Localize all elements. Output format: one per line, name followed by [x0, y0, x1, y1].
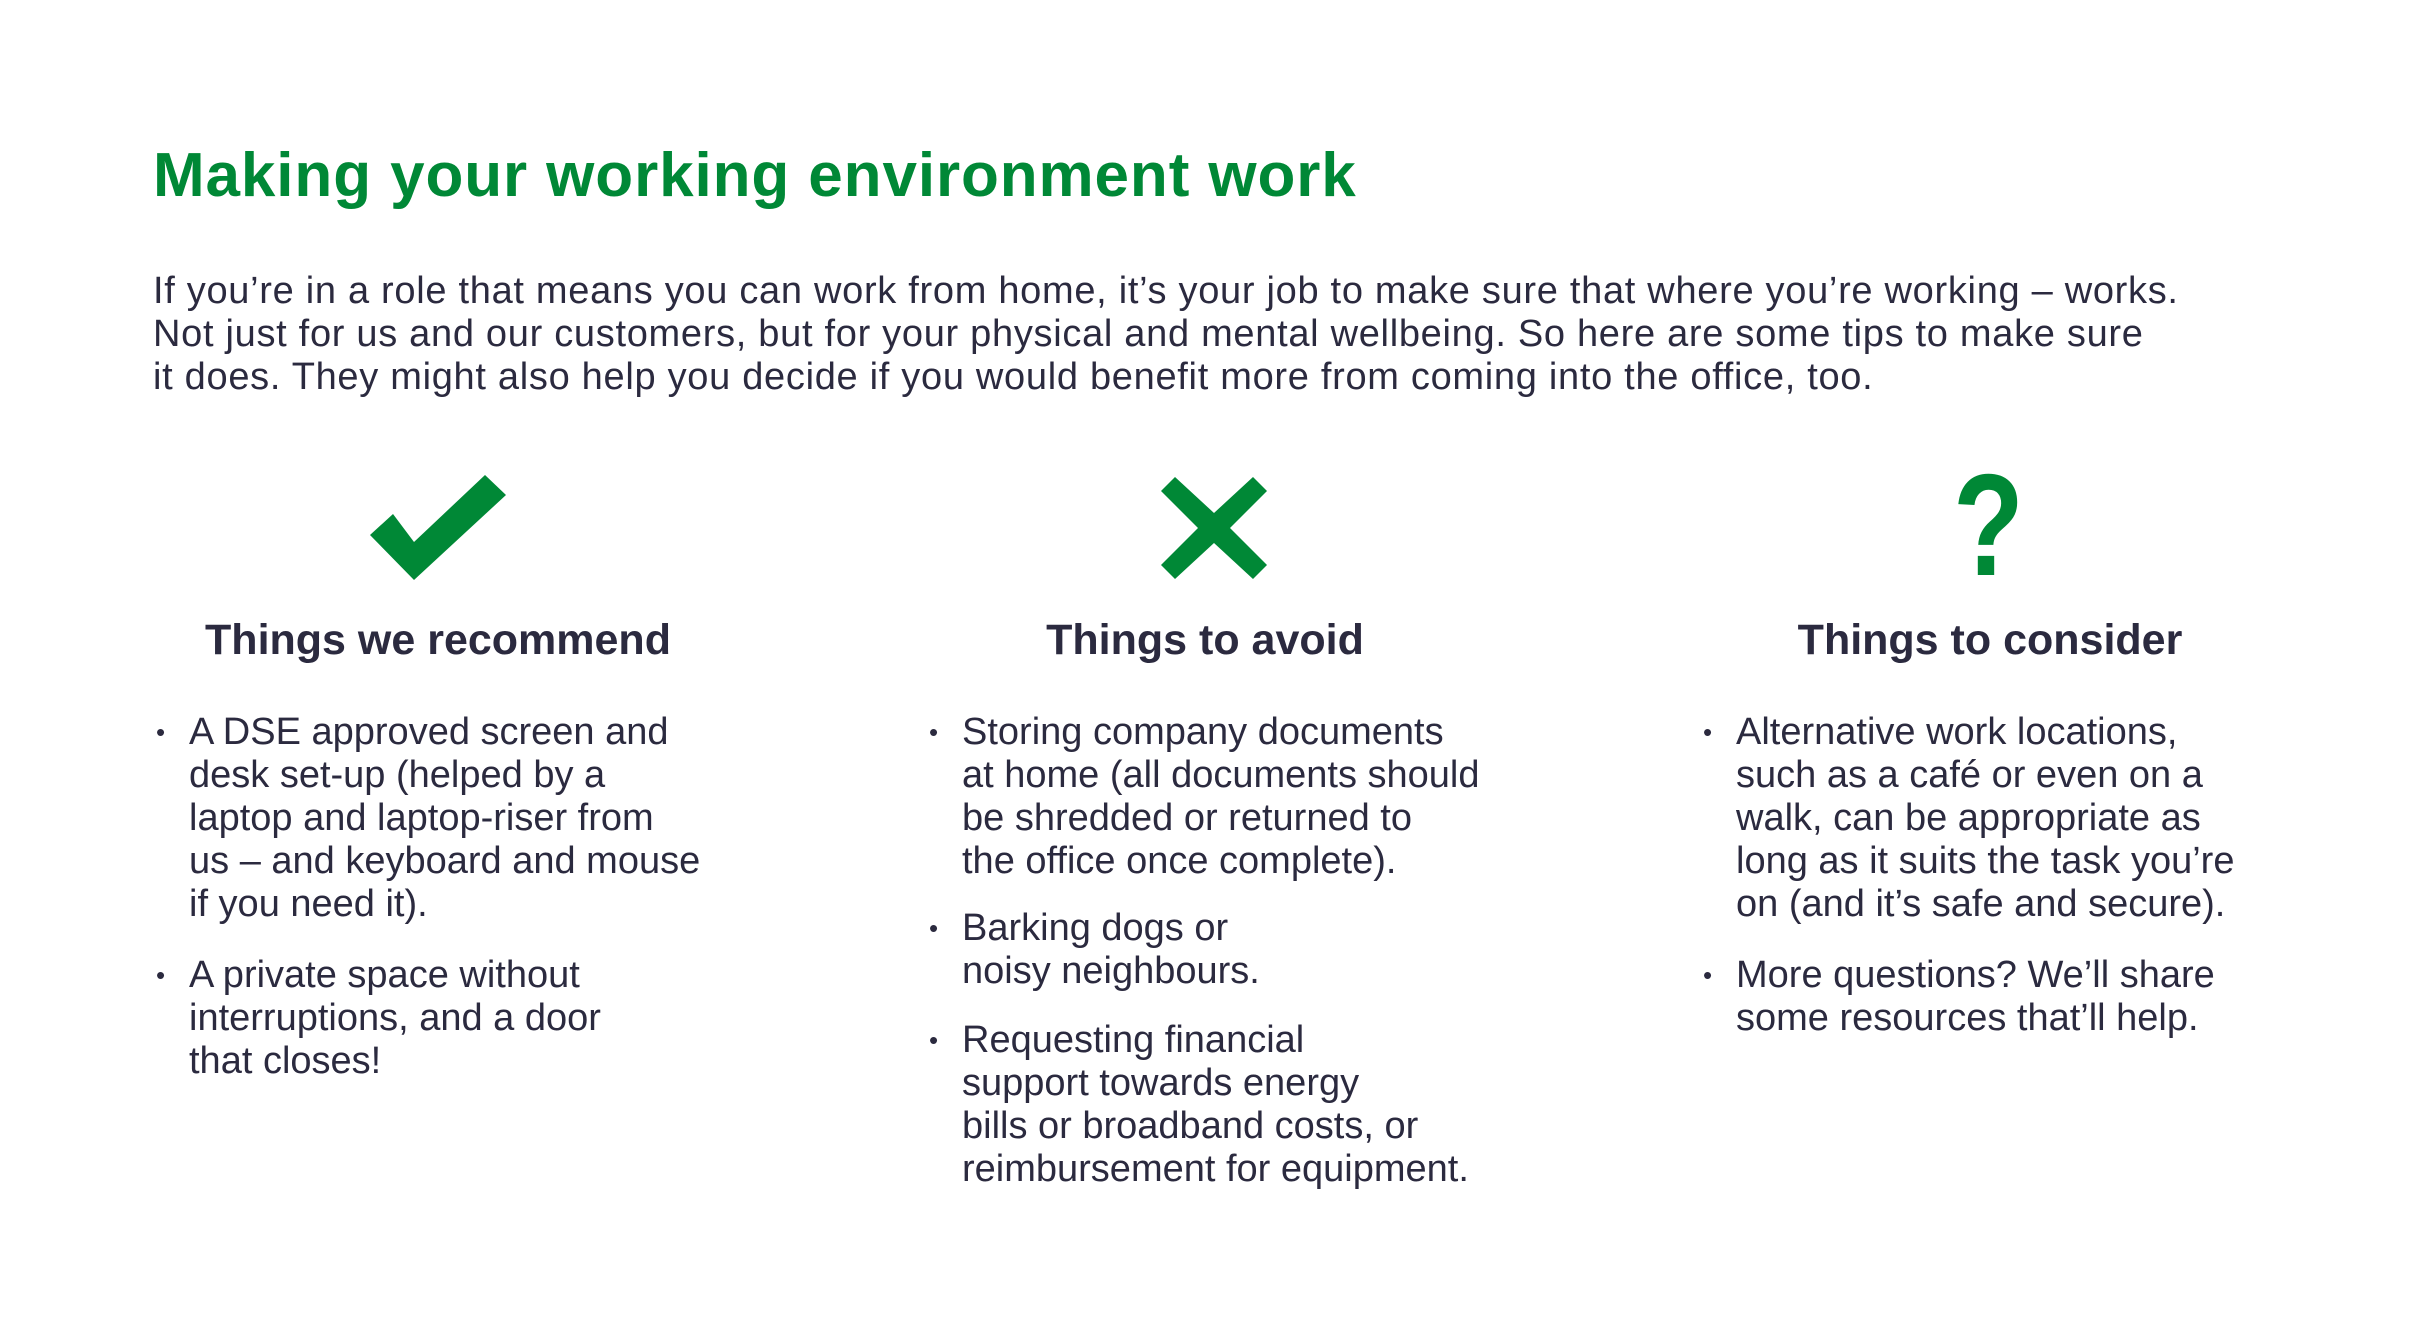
bullet: [1736, 711, 2234, 926]
bullet: [189, 954, 601, 1083]
bullet: Requesting financial: [962, 1019, 1304, 1061]
heading: consider: Things to consider: [1798, 616, 2182, 664]
bullet: on (and it’s safe and secure).: [1736, 883, 2225, 925]
intro text: [153, 270, 2179, 398]
bullet: A private space without: [189, 954, 580, 996]
bullet: that closes!: [189, 1040, 381, 1082]
column: recommend: [157, 711, 700, 1082]
heading: recommend: Things we recommend: [205, 616, 671, 664]
heading: avoid: Things to avoid: [1046, 616, 1364, 664]
bullet: be shredded or returned to: [962, 797, 1412, 839]
bullet: some resources that’ll help.: [1736, 997, 2199, 1039]
bullet: More questions? We’ll share: [1736, 954, 2215, 996]
bullet: bills or broadband costs, or: [962, 1105, 1418, 1147]
bullet: such as a café or even on a: [1736, 754, 2203, 796]
bullet: noisy neighbours.: [962, 950, 1260, 992]
bullet: [1736, 954, 2215, 1040]
bullet: reimbursement for equipment.: [962, 1148, 1469, 1190]
bullet: laptop and laptop-riser from: [189, 797, 654, 839]
bullet: us – and keyboard and mouse: [189, 840, 700, 882]
intro text: it does. They might also help you decide if you would benefit more from coming into the office, too.: [153, 356, 1873, 398]
icon: question mark: ?: [1953, 444, 2024, 606]
bullet: [962, 1019, 1469, 1191]
column: consider: [1704, 711, 2234, 1039]
bullet: if you need it).: [189, 883, 428, 925]
icon: check mark: [370, 475, 506, 580]
bullet: desk set-up (helped by a: [189, 754, 605, 796]
bullet: at home (all documents should: [962, 754, 1480, 796]
column: avoid: [930, 711, 1480, 1190]
title: Making your working environment work: [153, 141, 1357, 210]
bullet: [962, 907, 1260, 993]
bullet: the office once complete).: [962, 840, 1396, 882]
bullet: A DSE approved screen and: [189, 711, 669, 753]
bullet: [189, 711, 700, 926]
bullet: support towards energy: [962, 1062, 1359, 1104]
bullet: walk, can be appropriate as: [1736, 797, 2201, 839]
bullet: Alternative work locations,: [1736, 711, 2177, 753]
icon: cross: [1161, 477, 1267, 579]
intro text: Not just for us and our customers, but for your physical and mental wellbeing. So here are some tips to make sure: [153, 313, 2144, 355]
bullet: long as it suits the task you’re: [1736, 840, 2234, 882]
bullet: Storing company documents: [962, 711, 1444, 753]
bullet: Barking dogs or: [962, 907, 1228, 949]
intro text: If you’re in a role that means you can work from home, it’s your job to make sure that where you’re working – works.: [153, 270, 2179, 312]
bullet: interruptions, and a door: [189, 997, 601, 1039]
bullet: [962, 711, 1480, 883]
